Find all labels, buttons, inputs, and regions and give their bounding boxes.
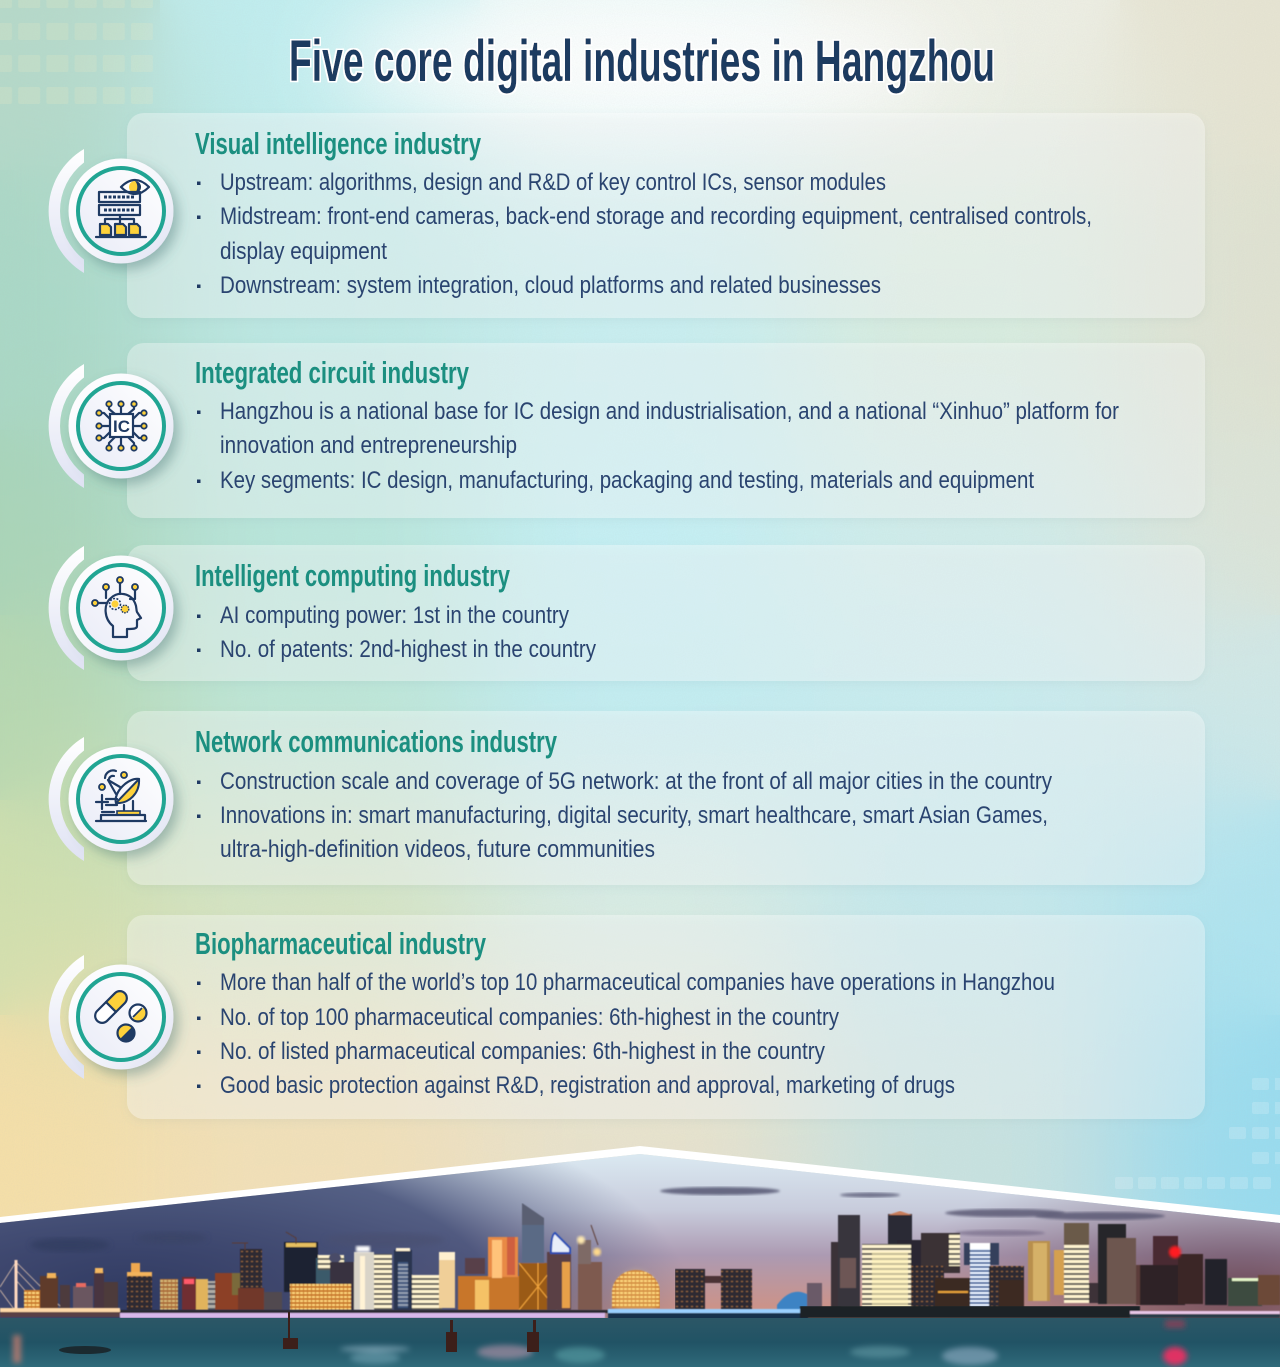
text block: biopharmaceutical bullets: Good basic protection against R&D, registration and approval, marketing of drugs [220, 1072, 955, 1099]
heading: intelligent computing: Intelligent computing industry [195, 558, 511, 593]
text block: intelligent computing bullets [197, 602, 596, 663]
text block: visual intelligence bullets [197, 169, 1092, 299]
heading: network communications: Network communications industry [195, 724, 558, 759]
text block: biopharmaceutical bullets: More than half of the world’s top 10 pharmaceutical companies have operations in Hangzhou [220, 969, 1055, 996]
heading: visual intelligence: Visual intelligence industry [195, 126, 482, 161]
text block: network communications bullets: Construction scale and coverage of 5G network: at the front of all major cities in the country [220, 768, 1052, 795]
panel: biopharmaceutical industry [127, 915, 1205, 1119]
text block: visual intelligence bullets: display equipment [220, 238, 387, 265]
text block: visual intelligence bullets: Upstream: algorithms, design and R&D of key control ICs, sensor modules [220, 169, 886, 196]
buildings: left [0, 1203, 660, 1310]
panel: intelligent computing industry [127, 545, 1205, 681]
text block: network communications bullets: Innovations in: smart manufacturing, digital security, smart healthcare, smart Asian Games, [220, 802, 1048, 829]
text block: integrated circuit bullets: Hangzhou is a national base for IC design and industrialisation, and a national “Xinhuo” platform for [220, 398, 1119, 425]
text block: integrated circuit bullets: innovation and entrepreneurship [220, 432, 517, 459]
icon: server network with eye [49, 149, 174, 273]
text block: network communications bullets: ultra-high-definition videos, future communities [220, 836, 655, 863]
panel: visual intelligence industry [127, 113, 1205, 318]
text block: intelligent computing bullets: AI computing power: 1st in the country [220, 602, 569, 629]
text block: biopharmaceutical bullets: No. of listed pharmaceutical companies: 6th-highest in the country [220, 1038, 825, 1065]
text block: biopharmaceutical bullets: No. of top 100 pharmaceutical companies: 6th-highest in the country [220, 1004, 839, 1031]
panel: network communications industry [127, 711, 1205, 885]
icon: integrated circuit chip: IC [113, 417, 130, 436]
text block: integrated circuit bullets [197, 398, 1119, 494]
buildings: right [675, 1211, 1280, 1310]
text block: visual intelligence bullets: Downstream: system integration, cloud platforms and related businesses [220, 272, 881, 299]
skyline photo [0, 1146, 1280, 1367]
text block: network communications bullets [197, 768, 1052, 863]
heading: biopharmaceutical: Biopharmaceutical industry [195, 926, 487, 961]
icon: satellite dish [49, 737, 174, 861]
water reflections [13, 1320, 1187, 1365]
icon: integrated circuit chip [49, 364, 174, 488]
panel: integrated circuit industry [127, 343, 1205, 518]
text block: intelligent computing bullets: No. of patents: 2nd-highest in the country [220, 636, 596, 663]
text block: visual intelligence bullets: Midstream: front-end cameras, back-end storage and recording equipment, centralised controls, [220, 203, 1092, 230]
icon: head with gears [49, 546, 174, 670]
text block: integrated circuit bullets: Key segments: IC design, manufacturing, packaging and testing, materials and equipment [220, 467, 1034, 494]
icon: pills [49, 955, 174, 1079]
heading: integrated circuit: Integrated circuit industry [195, 355, 470, 390]
text block: biopharmaceutical bullets [197, 969, 1055, 1099]
channel markers and rock [59, 1312, 539, 1354]
shoreline lights [0, 1306, 1280, 1319]
